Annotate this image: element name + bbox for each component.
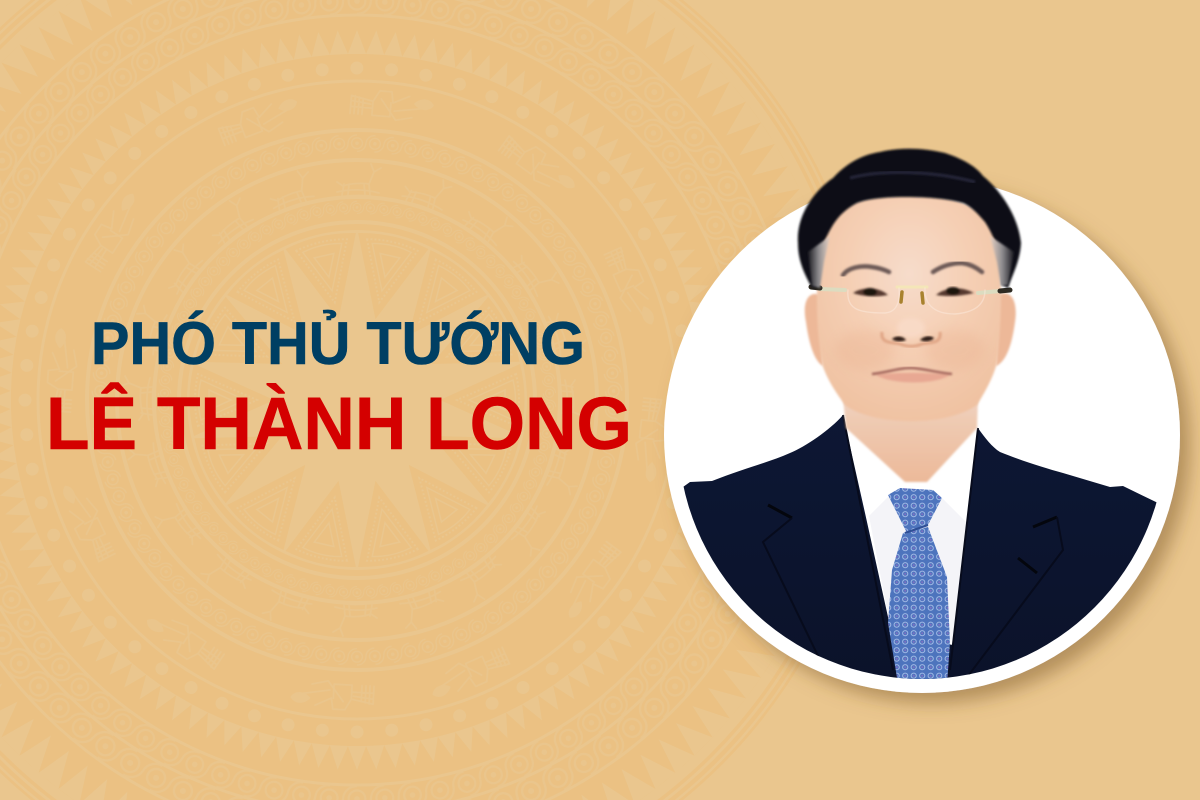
neck — [843, 398, 978, 482]
portrait white circle — [664, 177, 1180, 693]
title: deputy prime minister: PHÓ THỦ TƯỚNG — [91, 310, 585, 377]
face — [817, 195, 1001, 421]
hair — [798, 149, 1021, 288]
mouth — [872, 368, 952, 382]
face shading — [835, 330, 985, 370]
eyebrows — [843, 263, 982, 275]
necktie — [888, 488, 950, 684]
nose — [882, 318, 940, 346]
ears — [805, 293, 1016, 366]
title: name: LÊ THÀNH LONG — [46, 382, 632, 465]
glasses — [811, 287, 1010, 314]
portrait — [664, 149, 1180, 700]
background pattern: bronze drum — [0, 0, 825, 800]
eyes — [853, 287, 974, 296]
suit and shirt — [684, 414, 1156, 679]
